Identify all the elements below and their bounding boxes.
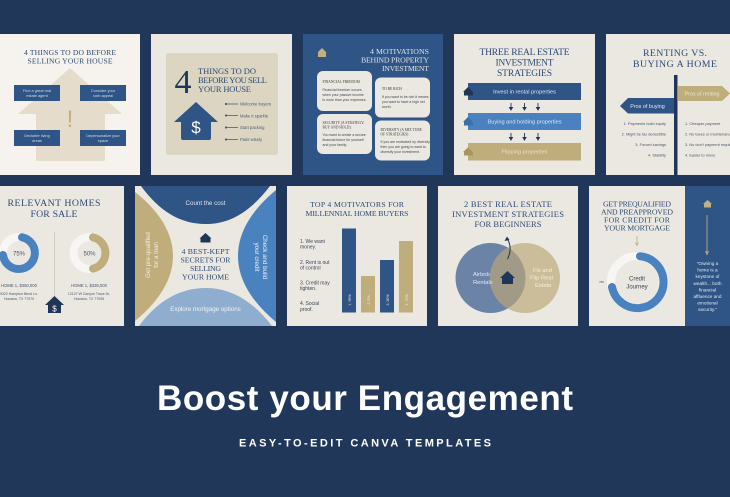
panel: 4 things before you sell: Paint wisely bbox=[240, 137, 263, 142]
panel: 2 best strategies bbox=[438, 186, 578, 326]
quote: emotional bbox=[697, 300, 718, 306]
panel: 4 motivations: is more than your expenses. bbox=[322, 98, 366, 102]
panel: 4 motivations: you want to have a high net bbox=[382, 100, 425, 104]
home details: Houston, TX 77095 bbox=[74, 297, 104, 301]
donut: credit journey: 780 bbox=[599, 280, 604, 284]
panel: 4 things before you sell: Make it sparkle bbox=[240, 114, 269, 118]
motivators list: money. bbox=[300, 244, 316, 250]
bar chart: 1. 95% bbox=[348, 295, 352, 305]
heading: THREE REAL ESTATE bbox=[480, 48, 570, 58]
panel: three strategies: Flipping properties bbox=[501, 150, 548, 156]
panel: three strategies: Invest in rental properties bbox=[493, 90, 556, 96]
heading: RELEVANT HOMES bbox=[8, 198, 100, 209]
big number 4: 4 bbox=[174, 64, 192, 101]
donut: credit journey bbox=[599, 256, 664, 308]
heading bbox=[24, 48, 116, 66]
renting list: 4. Easier to move bbox=[685, 152, 715, 158]
arrow bbox=[507, 238, 510, 259]
bar chart bbox=[342, 228, 413, 312]
arrow: tan down bbox=[636, 236, 638, 246]
buying list: 4. Stability bbox=[648, 152, 666, 158]
icon: house bbox=[200, 233, 212, 242]
heading: TOP 4 MOTIVATORS FOR bbox=[310, 200, 405, 209]
quote: home is a bbox=[697, 268, 718, 272]
panel: 4 things before selling house: Declutter living bbox=[24, 133, 50, 138]
buying list: 1. Payments build equity bbox=[624, 121, 666, 126]
panel: 4 motivations: TO BE RICH bbox=[382, 87, 402, 91]
panel: renting vs buying: Pros of buying bbox=[630, 104, 665, 110]
heading: YOUR MORTGAGE bbox=[604, 224, 670, 232]
heading: YOUR HOUSE bbox=[198, 84, 251, 94]
panel: 4 best-kept secrets: Check and build bbox=[261, 235, 268, 280]
bar chart: 3. 30% bbox=[386, 295, 390, 305]
quote: wealth... both bbox=[694, 281, 722, 286]
arrow: pros of buying bbox=[620, 98, 674, 114]
heading: THINGS TO DO bbox=[198, 66, 256, 76]
cards bbox=[317, 71, 430, 160]
heading: YOUR HOME bbox=[182, 272, 229, 282]
panel: 4 motivations: SECURITY (A STRATEGY: bbox=[322, 121, 364, 125]
shape: right bbox=[238, 190, 276, 322]
heading: SECRETS FOR bbox=[180, 256, 231, 264]
panel: three strategies: Buying and holding properties bbox=[487, 120, 562, 126]
panel: 4 best-kept secrets: Get pre-qualified bbox=[145, 232, 152, 278]
boxes bbox=[14, 85, 126, 146]
bars bbox=[468, 83, 581, 100]
panel: 4 things before you sell bbox=[151, 34, 292, 175]
home details: 12127 W Canyon Trace Dr, bbox=[68, 292, 110, 296]
heading bbox=[180, 247, 231, 282]
panel: 4 motivations: then you are going to want to bbox=[380, 145, 426, 149]
bar chart: 4. 70% bbox=[405, 295, 409, 305]
heading: INVESTMENT STRATEGIES bbox=[452, 209, 564, 219]
venn diagram: Estate bbox=[535, 283, 551, 289]
panel: 4 things before selling house: estate agent bbox=[26, 93, 49, 98]
heading: FOR BEGINNERS bbox=[474, 219, 542, 229]
donut: credit journey: Credit bbox=[629, 276, 645, 282]
motivators list: 4. Social bbox=[300, 301, 319, 307]
buying list: 2. Might be tax deductible bbox=[622, 132, 666, 136]
venn diagram: Flip Real bbox=[530, 276, 553, 282]
panel: 4 motivations: OF STRATEGIES) bbox=[380, 132, 409, 136]
heading: GET PREQUALIFIED bbox=[603, 200, 671, 208]
quote: financial bbox=[699, 288, 716, 292]
icon: dollar house bbox=[45, 296, 64, 313]
heading: FOR SALE bbox=[30, 209, 78, 220]
panel: 4 things before selling house: Find a great real bbox=[23, 88, 51, 93]
heading bbox=[480, 48, 570, 79]
heading: INVESTMENT bbox=[496, 58, 554, 68]
panel: 4 motivations: BUY AND HOLD): bbox=[322, 126, 352, 130]
panel: 4 things before you sell: Welcome buyers bbox=[240, 102, 271, 106]
home details: HOME 1, $350,000 bbox=[1, 283, 38, 288]
panel: renting vs buying: Pros of renting bbox=[684, 92, 720, 98]
panel: 4 motivations: If you want to be rich it means bbox=[382, 95, 429, 99]
heading: INVESTMENT bbox=[382, 64, 429, 73]
venn diagram bbox=[456, 236, 560, 313]
bar icons bbox=[463, 87, 473, 96]
panel: 4 things before you sell: $ bbox=[191, 118, 201, 137]
motivators list: of control bbox=[300, 266, 321, 272]
heading: MILLENNIAL HOME BUYERS bbox=[306, 209, 408, 218]
renting list: 1. Cheaper payment bbox=[685, 121, 721, 126]
side labels: Count the cost bbox=[186, 200, 226, 207]
panel: 4 motivations: diversify your investment. bbox=[380, 150, 420, 154]
icon: house bbox=[500, 271, 515, 284]
home details: HOME 1, $339,000 bbox=[71, 283, 108, 288]
heading: RENTING VS. bbox=[643, 48, 707, 59]
heading: 4 MOTIVATIONS bbox=[370, 47, 429, 56]
shape: top bbox=[141, 186, 270, 224]
panel: 4 things before selling house: Depersonalize your bbox=[86, 133, 120, 138]
motivators list: proof. bbox=[300, 307, 313, 313]
panel: 4 best-kept secrets bbox=[135, 186, 276, 326]
quote: keystone of bbox=[696, 274, 720, 279]
bar chart: 2. 5% bbox=[367, 296, 371, 304]
icon: tan house bbox=[703, 200, 712, 208]
heading: SELLING bbox=[190, 264, 221, 273]
icon: dollar house bbox=[174, 102, 218, 140]
arrow list bbox=[225, 103, 238, 140]
panel: 4 motivations: You want to create a secure bbox=[322, 133, 366, 137]
panel: 4 things before you sell: Start packing bbox=[240, 125, 265, 130]
panel: 4 motivations: financial future for yourself bbox=[322, 138, 364, 142]
donut: credit journey: Journey bbox=[626, 284, 648, 290]
heading: AND PREAPPROVED bbox=[601, 208, 673, 216]
heading: BEHIND PROPERTY bbox=[361, 56, 429, 64]
quote: "Owning a bbox=[697, 261, 719, 266]
home details bbox=[0, 283, 110, 301]
shape: left bbox=[135, 192, 173, 321]
motivators list: 1. We want bbox=[300, 239, 326, 245]
venn diagram: Rentals bbox=[473, 280, 493, 286]
heading: 4 THINGS TO DO BEFORE bbox=[24, 48, 116, 57]
donut 50%: 50% bbox=[83, 252, 96, 258]
down arrows bbox=[510, 103, 540, 140]
heading: FOR CREDIT FOR bbox=[604, 216, 671, 224]
quote bbox=[693, 261, 722, 312]
heading: 2 BEST REAL ESTATE bbox=[464, 199, 552, 209]
home details: 9322 Hampton Bend Ln, bbox=[0, 292, 38, 296]
buying list bbox=[622, 121, 666, 158]
panel: top 4 motivators bbox=[287, 186, 427, 326]
panel: 4 best-kept secrets: Explore mortgage options bbox=[170, 306, 241, 313]
panel: 4 motivations bbox=[303, 34, 443, 175]
panel: 4 things before selling house: space bbox=[98, 138, 108, 143]
panel: 4 motivations: DIVERSITY (A MIX TURE bbox=[380, 128, 423, 132]
panel: 4 motivations: when your passive income bbox=[322, 93, 364, 97]
heading: BUYING A HOME bbox=[633, 59, 717, 70]
venn diagram: Fix and bbox=[533, 268, 552, 274]
panel: 4 things before selling house: areas bbox=[32, 138, 42, 143]
icon: house arrow bbox=[18, 68, 122, 161]
exclamation mark: ! bbox=[67, 106, 73, 133]
buying list: 3. Forced savings bbox=[635, 142, 666, 147]
venn diagram: Airbnb bbox=[473, 272, 490, 278]
heading bbox=[452, 199, 564, 229]
title: Boost your Engagement bbox=[157, 379, 573, 418]
panel: 4 motivations: If you are motivated by diversity bbox=[380, 140, 430, 144]
motivators list: tighten. bbox=[300, 286, 316, 292]
heading: STRATEGIES bbox=[497, 69, 552, 79]
panel: 4 things before selling house: Consider your bbox=[91, 88, 116, 93]
heading bbox=[633, 48, 717, 70]
heading bbox=[601, 200, 673, 232]
motivators list: 2. Rent is out bbox=[300, 260, 330, 266]
renting list bbox=[685, 121, 730, 158]
arrow: tan down long bbox=[706, 215, 708, 254]
heading bbox=[361, 47, 429, 73]
panel: 4 things before selling house bbox=[0, 34, 140, 175]
donut 75%: 75% bbox=[13, 252, 26, 258]
panel: 4 motivations: FINANCIAL FREEDOM bbox=[322, 80, 361, 84]
heading bbox=[198, 66, 267, 94]
quote: security." bbox=[698, 307, 717, 312]
quote: affluence and bbox=[693, 294, 722, 299]
heading: BEFORE YOU SELL bbox=[198, 75, 267, 85]
motivators list: 3. Credit may bbox=[300, 280, 330, 286]
panel: relevant homes bbox=[0, 186, 124, 326]
panel: three strategies bbox=[454, 34, 595, 175]
panel: credit journey bbox=[589, 186, 730, 326]
shape: bottom bbox=[139, 288, 272, 326]
panel: 4 best-kept secrets: for a loan bbox=[153, 242, 160, 268]
panel: renting vs buying bbox=[606, 34, 730, 175]
panel: 4 motivations: Financial freedom occurs bbox=[322, 88, 362, 92]
subtitle: EASY-TO-EDIT CANVA TEMPLATES bbox=[239, 438, 491, 450]
heading bbox=[306, 200, 408, 218]
motivators list bbox=[300, 239, 330, 313]
icon: tan house bbox=[318, 48, 326, 57]
heading: SELLING YOUR HOUSE bbox=[28, 56, 113, 66]
heading bbox=[8, 198, 100, 220]
panel: relevant homes: $ bbox=[52, 304, 57, 314]
panel: 4 best-kept secrets: your credit bbox=[253, 243, 260, 272]
arrow: pros of renting bbox=[678, 86, 730, 101]
home details: Houston, TX 77070 bbox=[4, 297, 34, 301]
panel: 4 motivations: and your family. bbox=[322, 143, 347, 147]
heading: 4 BEST-KEPT bbox=[182, 247, 230, 256]
panel: 4 things before selling house: curb appeal bbox=[93, 93, 113, 98]
panel: 4 motivations: worth. bbox=[382, 105, 392, 109]
